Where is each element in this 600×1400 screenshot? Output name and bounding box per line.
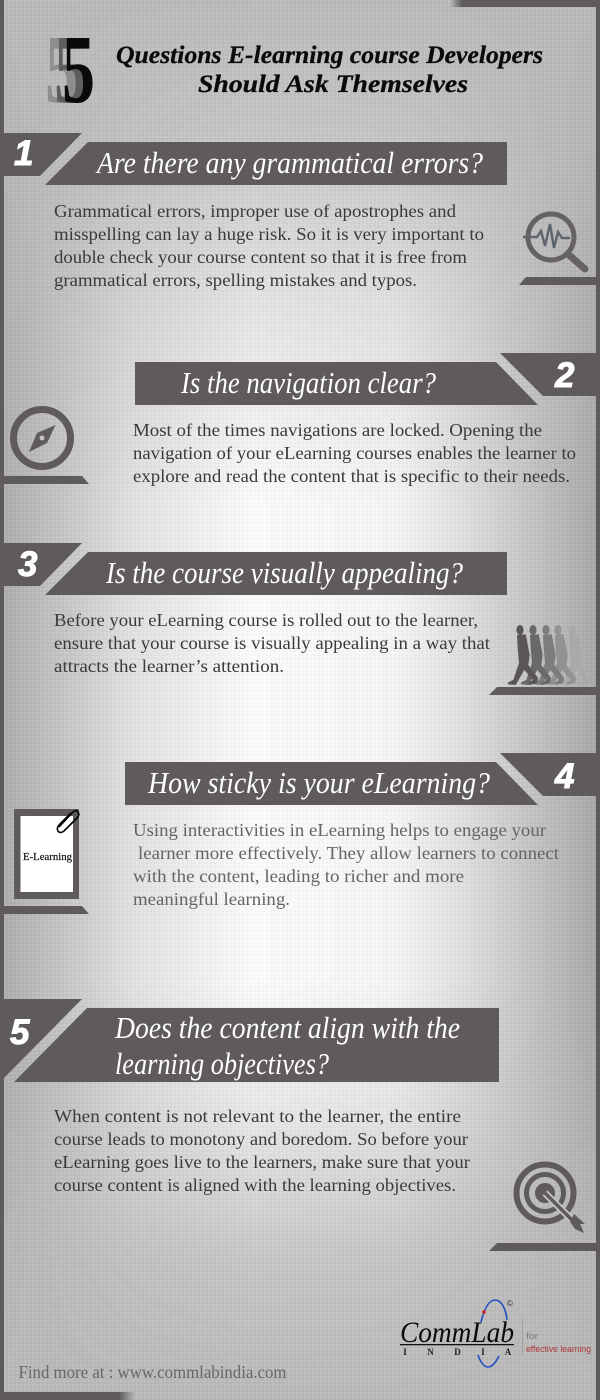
icon: E-Learning document with paperclip: E-Learning (23, 852, 72, 863)
logo India letters: I (403, 1347, 407, 1357)
heading 4: How sticky is your eLearning? (147, 765, 490, 800)
heading 3: Is the course visually appealing? (105, 555, 463, 590)
logo India letters: N (427, 1347, 434, 1357)
logo divider (522, 1319, 523, 1355)
icon shelf 3 (489, 687, 597, 695)
number tab 4 (500, 753, 596, 796)
big number 5: 5 (45, 16, 79, 124)
icon shelf 1 (519, 277, 597, 285)
number tab 2 (500, 353, 596, 396)
logo wordmark: CommLab (400, 1316, 514, 1349)
body text 4: Using interactivities in eLearning helps to engage your (133, 820, 546, 840)
logo: CommLab India (400, 1299, 591, 1367)
heading 5 (14, 1008, 499, 1082)
big number 5: 5 (54, 16, 88, 124)
heading 2 (135, 362, 538, 405)
heading 1 (45, 142, 507, 185)
icon: target with arrow (516, 1164, 585, 1233)
body text 1: misspelling can lay a huge risk. So it is very important to (54, 224, 484, 244)
icon: walking figures (508, 625, 590, 685)
body text 5: course content is aligned with the learning objectives. (54, 1175, 456, 1195)
big number 5: 5 (62, 16, 95, 124)
body text 1: double check your course content so that it is free from (54, 247, 467, 267)
body text 5: When content is not relevant to the learner, the entire (54, 1106, 461, 1126)
logo tagline: for (526, 1331, 538, 1342)
logo orbit (478, 1300, 507, 1367)
number tab 3: 3 (18, 545, 38, 584)
title line 1: Questions E-learning course Developers (116, 42, 543, 69)
heading 3 (45, 552, 507, 595)
footer link text: Find more at : www.commlabindia.com (18, 1362, 287, 1382)
heading 5: learning objectives? (115, 1046, 329, 1081)
logo tagline: effective learning (526, 1344, 591, 1355)
body text 2 (133, 420, 576, 486)
heading 1: Are there any grammatical errors? (95, 145, 483, 180)
icon: magnifier with pulse (523, 214, 585, 269)
logo India letters: D (454, 1347, 461, 1357)
icon shelf 4 (4, 906, 89, 914)
logo red dot (482, 1310, 486, 1314)
body text 2: explore and read the content that is specific to their needs. (133, 466, 570, 486)
number tab 5: 5 (10, 1013, 30, 1052)
number tab 1 (4, 133, 82, 176)
body text 4: learner more effectively. They allow learners to connect (138, 843, 559, 863)
number tab 1: 1 (14, 134, 33, 173)
body text 3: Before your eLearning course is rolled out to the learner, (54, 610, 478, 630)
body text 2: navigation of your eLearning courses enables the learner to (133, 443, 576, 463)
body text 3: ensure that your course is visually appealing in a way that (54, 633, 490, 653)
title line 2: Should Ask Themselves (198, 71, 468, 98)
section 3 (4, 543, 597, 695)
body text 4: meaningful learning. (133, 889, 290, 909)
body text 1: grammatical errors, spelling mistakes and typos. (54, 270, 417, 290)
number tab 4: 4 (554, 757, 574, 796)
body text 2: Most of the times navigations are locked. Opening the (133, 420, 542, 440)
section 5 (4, 999, 597, 1251)
logo India letters: I (481, 1347, 485, 1357)
logo tagline (526, 1331, 591, 1355)
icon: compass (14, 410, 70, 466)
icon shelf 2 (4, 476, 89, 484)
section 4 (4, 753, 596, 914)
body text 4: with the content, leading to richer and more (133, 866, 464, 886)
icon: E-Learning document with paperclip (14, 809, 79, 899)
section 1 (4, 133, 597, 290)
section 2 (4, 353, 596, 486)
body text 1: Grammatical errors, improper use of apostrophes and (54, 201, 456, 221)
title (45, 16, 543, 124)
body text 1 (54, 201, 484, 290)
logo India letters: A (505, 1347, 512, 1357)
number tab 3 (4, 543, 82, 586)
icon shelf 5 (489, 1243, 597, 1251)
number tab 5 (4, 999, 82, 1078)
heading 5: Does the content align with the (114, 1010, 460, 1045)
body text 3: attracts the learner’s attention. (54, 656, 284, 676)
heading 2: Is the navigation clear? (180, 365, 436, 400)
logo India letters (403, 1347, 512, 1357)
number tab 2: 2 (554, 356, 575, 395)
body text 3 (54, 610, 490, 676)
logo copyright: © (507, 1299, 513, 1308)
body text 5: course leads to monotony and boredom. So before your (54, 1129, 468, 1149)
body text 4 (133, 820, 559, 909)
logo rule (400, 1344, 514, 1345)
body text 5 (54, 1106, 470, 1195)
body text 5: eLearning goes live to the learners, make sure that your (54, 1152, 470, 1172)
